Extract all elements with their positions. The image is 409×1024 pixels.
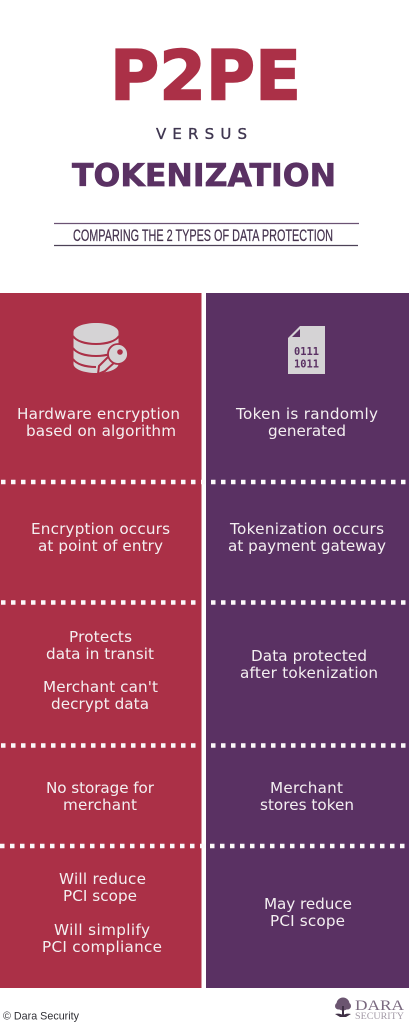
- text: encryption occurs: Encryption occurs: [31, 520, 170, 538]
- text: PCI scope: Will reduce: [59, 870, 146, 888]
- text: hardware encryption: based on algorithm: [26, 422, 176, 440]
- text: protects data: data in transit: [46, 645, 154, 663]
- logo: Dara Security: [335, 998, 404, 1022]
- text: protects data: Merchant can't: [43, 678, 158, 696]
- text: token generated: Token is randomly: [235, 405, 378, 423]
- text: encryption occurs: at point of entry: [38, 537, 163, 555]
- text: data protected: Data protected: [251, 647, 367, 665]
- logo: Dara Security: DARA: [355, 998, 404, 1014]
- text: PCI scope: [42, 870, 162, 956]
- text: merchant stores token: Merchant: [270, 779, 343, 797]
- footer: copyright: © Dara Security: [3, 1010, 79, 1022]
- text: data protected: [240, 647, 378, 682]
- text: may reduce: May reduce: [264, 895, 352, 913]
- text: no storage: [46, 779, 155, 814]
- text: token generated: [235, 405, 378, 440]
- text: protects data: decrypt data: [51, 695, 149, 713]
- heading: versus: VERSUS: [156, 125, 247, 143]
- text: no storage: No storage for: [46, 779, 155, 797]
- panel: P2PE column: [0, 293, 202, 988]
- text: hardware encryption: Hardware encryption: [17, 405, 180, 423]
- text: merchant stores token: [260, 779, 354, 814]
- text: no storage: merchant: [63, 796, 137, 814]
- icon: database with key: [73, 323, 128, 374]
- text: merchant stores token: stores token: [260, 796, 354, 814]
- text: may reduce: [264, 895, 352, 930]
- title: tokenization: TOKENIZATION: [72, 158, 336, 194]
- text: token generated: generated: [268, 422, 346, 440]
- text: data protected: after tokenization: [240, 664, 378, 682]
- text: may reduce: PCI scope: [270, 912, 345, 930]
- text: PCI scope: Will simplify: [54, 921, 150, 939]
- icon: binary document: [288, 326, 325, 374]
- title: P2PE: P2PE: [110, 36, 301, 116]
- icon: binary document: 1011: [294, 358, 319, 370]
- logo: Dara Security: SECURITY: [355, 1012, 404, 1022]
- text: protects data: Protects: [69, 628, 132, 646]
- text: tokenization occurs: Tokenization occurs: [229, 520, 384, 538]
- text: hardware encryption: [17, 405, 180, 440]
- panel: tokenization column: [206, 293, 409, 988]
- text: tokenization occurs: at payment gateway: [228, 537, 386, 555]
- icon: binary document: 0111: [294, 345, 319, 358]
- text: protects data: [43, 628, 158, 713]
- text: PCI scope: PCI scope: [63, 887, 137, 905]
- text: encryption occurs: [31, 520, 170, 555]
- text: tokenization occurs: [228, 520, 386, 555]
- text: PCI scope: PCI compliance: [42, 938, 162, 956]
